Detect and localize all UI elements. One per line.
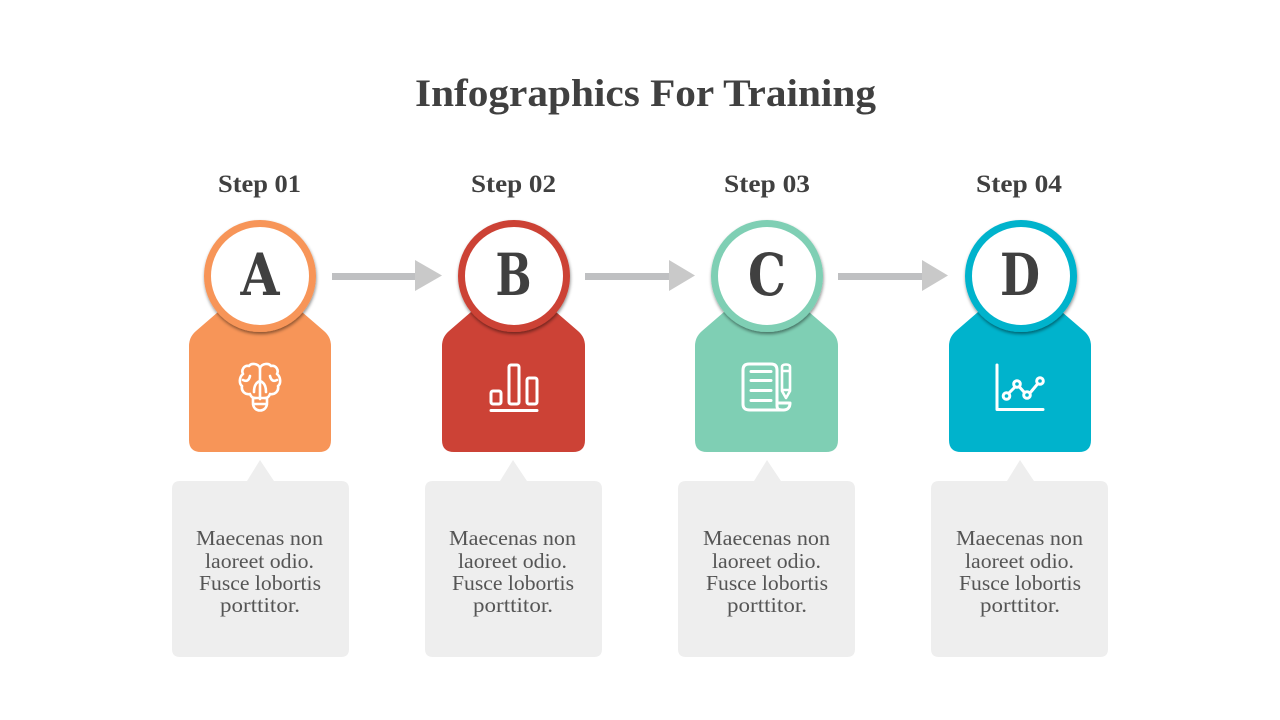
step heading: Step 01	[218, 171, 301, 198]
letter badge	[208, 224, 312, 328]
icon: bar chart	[491, 365, 537, 410]
icon: brain	[240, 364, 280, 410]
text box: laoreet odio.	[712, 549, 821, 573]
letter badge: B	[496, 241, 532, 309]
arrow B to C	[585, 260, 695, 291]
text box	[678, 460, 855, 657]
arrow C to D	[838, 260, 948, 291]
text box	[931, 460, 1108, 657]
step heading: Step 03	[724, 171, 810, 198]
arrow A to B	[332, 260, 442, 291]
letter badge	[714, 224, 820, 328]
text box: Maecenas non	[956, 526, 1084, 550]
text box: Fusce lobortis	[959, 571, 1081, 595]
colored card	[442, 312, 585, 452]
text box: Fusce lobortis	[452, 571, 574, 595]
letter badge: A	[240, 241, 280, 309]
step heading: Step 02	[471, 171, 556, 198]
text box: Fusce lobortis	[199, 571, 321, 595]
text box: Fusce lobortis	[706, 571, 828, 595]
text box: porttitor.	[727, 593, 807, 617]
text box: porttitor.	[220, 593, 300, 617]
step A column	[172, 171, 349, 657]
step D column	[931, 171, 1108, 657]
step C column	[678, 171, 855, 657]
icon: line chart	[997, 365, 1043, 410]
text box	[425, 460, 602, 657]
text box	[172, 460, 349, 657]
text box: Maecenas non	[449, 526, 577, 550]
text box: Maecenas non	[703, 526, 831, 550]
letter badge: D	[1000, 241, 1040, 309]
text box: porttitor.	[473, 593, 553, 617]
title: Infographics For Training	[415, 72, 877, 115]
letter badge	[968, 224, 1074, 328]
text box: Maecenas non	[196, 526, 324, 550]
icon: document and pencil	[743, 364, 790, 410]
text box: laoreet odio.	[458, 549, 567, 573]
letter badge: C	[748, 241, 786, 309]
text box: laoreet odio.	[205, 549, 314, 573]
letter badge	[462, 224, 566, 328]
colored card	[695, 312, 838, 452]
text box: laoreet odio.	[965, 549, 1074, 573]
step B column	[425, 171, 602, 657]
step heading: Step 04	[976, 171, 1063, 198]
colored card	[949, 312, 1091, 452]
colored card	[189, 312, 331, 452]
text box: porttitor.	[980, 593, 1060, 617]
